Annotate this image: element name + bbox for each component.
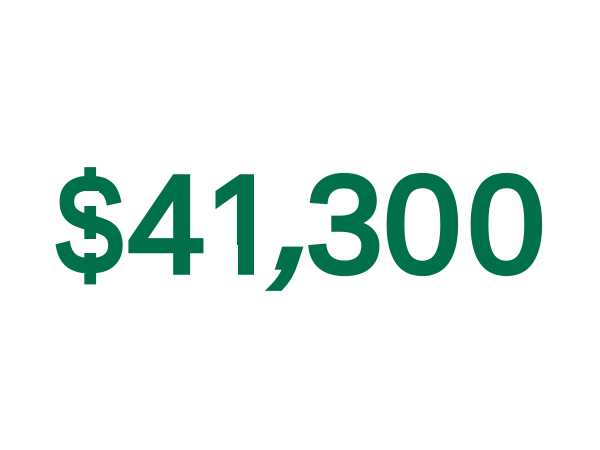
headline figure: $41,300: 3: [306, 148, 383, 302]
headline figure: $41,300: [56, 167, 542, 291]
headline figure: $41,300: ,: [252, 118, 357, 302]
headline figure: $41,300: 0: [468, 148, 545, 302]
headline figure: $41,300: 0: [384, 148, 461, 302]
headline figure: $41,300: 1: [205, 148, 282, 302]
headline figure: $41,300: $: [57, 148, 122, 302]
headline figure: $41,300: 4: [128, 148, 205, 302]
